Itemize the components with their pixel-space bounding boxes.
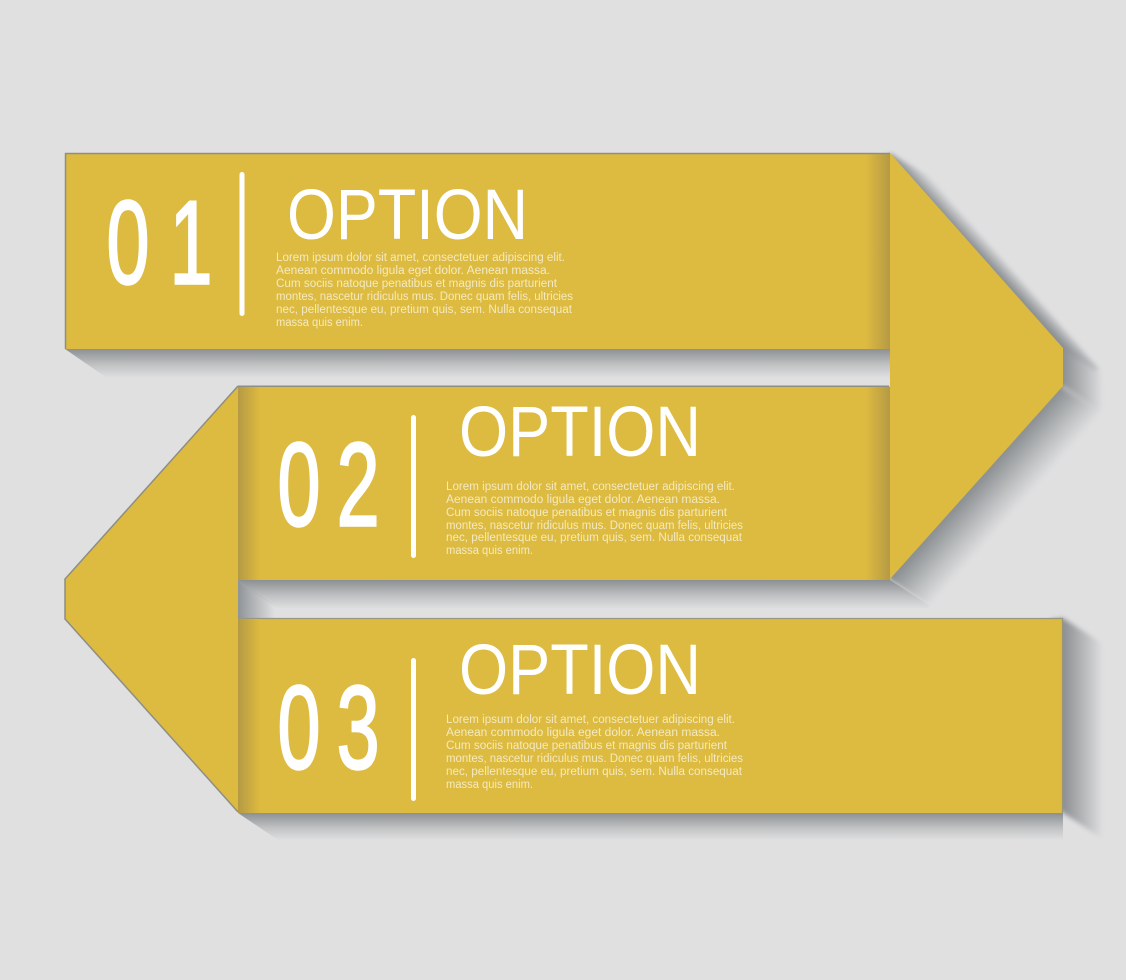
- number 03: 03: [278, 662, 380, 795]
- banner 02: [238, 386, 890, 580]
- heading 02: OPTION: [459, 393, 701, 472]
- body text 02: Cum sociis natoque penatibus et magnis dis parturient: [446, 507, 728, 519]
- banner 02 top edge: [238, 386, 889, 387]
- banner 02 right fold shade: [866, 387, 890, 580]
- body text 03: Aenean commodo ligula eget dolor. Aenean massa.: [446, 727, 720, 739]
- number 02: 02: [278, 419, 380, 552]
- body text 02: massa quis enim.: [446, 545, 533, 557]
- banner 03 outline: [238, 618, 1062, 813]
- panel: option 02: [65, 386, 890, 812]
- panel: option 01: [65, 153, 1063, 579]
- body text 01: Cum sociis natoque penatibus et magnis dis parturient: [276, 278, 558, 290]
- body text 03: Cum sociis natoque penatibus et magnis dis parturient: [446, 740, 728, 752]
- body text 03: Lorem ipsum dolor sit amet, consectetuer adipiscing elit.: [446, 714, 735, 726]
- arrow pointing right: [890, 153, 1063, 579]
- panel: option 03: [238, 618, 1063, 813]
- heading 01: OPTION: [287, 176, 528, 255]
- shadow in lower gap: [238, 580, 275, 618]
- divider 02: [411, 415, 416, 558]
- banner 03 left fold shade: [238, 619, 260, 813]
- body text 02: Lorem ipsum dolor sit amet, consectetuer adipiscing elit.: [446, 481, 735, 493]
- banner 03: [238, 618, 1063, 813]
- divider 03: [411, 658, 416, 801]
- divider 01: [240, 172, 244, 316]
- body text 03: massa quis enim.: [446, 779, 533, 791]
- body text 01: Aenean commodo ligula eget dolor. Aenean massa.: [276, 265, 550, 277]
- body text 01: Lorem ipsum dolor sit amet, consectetuer adipiscing elit.: [276, 252, 565, 264]
- body text 03: [446, 714, 743, 791]
- body text 01: massa quis enim.: [276, 317, 363, 329]
- banner 02 left fold shade: [238, 387, 260, 580]
- heading 03: OPTION: [459, 631, 701, 710]
- body text 03: montes, nascetur ridiculus mus. Donec quam felis, ultricies: [446, 753, 743, 765]
- body text 02: Aenean commodo ligula eget dolor. Aenean massa.: [446, 494, 720, 506]
- body text 02: [446, 481, 743, 557]
- banner 01 outline: [66, 154, 890, 349]
- number 01: 01: [106, 177, 213, 310]
- body text 01: nec, pellentesque eu, pretium quis, sem. Nulla consequat: [276, 304, 573, 316]
- arrow pointing left: [65, 386, 238, 812]
- body text 02: montes, nascetur ridiculus mus. Donec quam felis, ultricies: [446, 520, 743, 532]
- body text 01: montes, nascetur ridiculus mus. Donec quam felis, ultricies: [276, 291, 573, 303]
- banner 01: [65, 153, 890, 349]
- arrow outline: [65, 386, 238, 812]
- drop shadows: [65, 153, 1103, 840]
- body text 01: [276, 252, 573, 329]
- body text 02: nec, pellentesque eu, pretium quis, sem. Nulla consequat: [446, 532, 743, 544]
- banner 01 fold shade: [866, 153, 890, 349]
- body text 03: nec, pellentesque eu, pretium quis, sem. Nulla consequat: [446, 766, 743, 778]
